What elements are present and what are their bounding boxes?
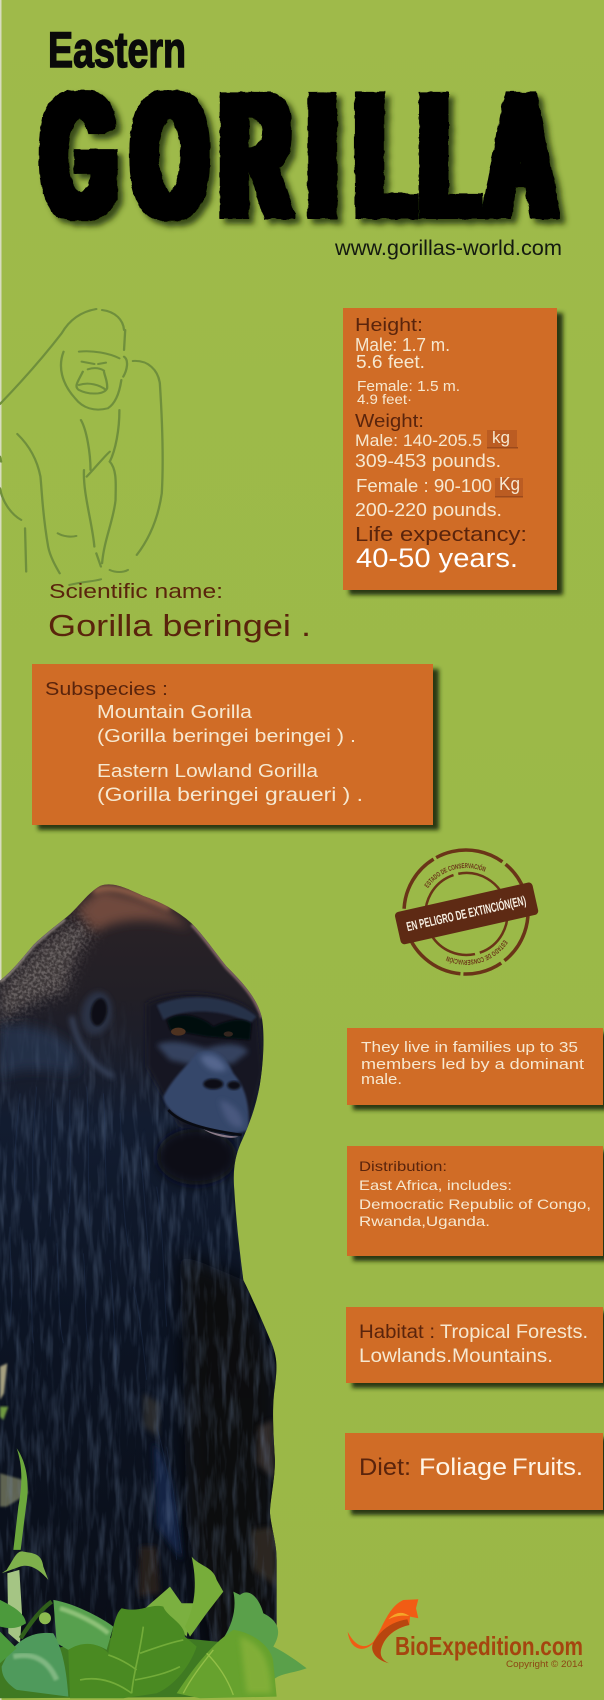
kg highlight xyxy=(487,430,523,498)
panel: families xyxy=(347,1028,603,1105)
height text: 4.9 feet· xyxy=(357,391,412,407)
back leaf xyxy=(143,1587,193,1637)
centre leaf xyxy=(68,1606,197,1698)
diet text: Diet: xyxy=(359,1454,411,1481)
habitat text: Tropical Forests. xyxy=(440,1321,588,1343)
life expectancy text: 40-50 years. xyxy=(356,543,518,573)
height text: 5.6 feet. xyxy=(356,352,425,372)
weight text: Female : 90-100 xyxy=(356,476,492,496)
foliage base xyxy=(0,1633,267,1698)
upper right leaf xyxy=(185,1557,223,1637)
lower arm shading xyxy=(0,1253,277,1660)
panel: subspecies xyxy=(32,664,433,825)
gorilla shading and fur xyxy=(0,860,283,1687)
foliage xyxy=(0,1448,307,1698)
far right leaf xyxy=(223,1592,307,1680)
stamp band: EN PELIGRO DE EXTINCIÓN(EN) xyxy=(405,893,527,934)
icon: conservation stamp xyxy=(395,848,538,976)
life expectancy text: Life expectancy: xyxy=(355,523,527,546)
subspecies heading: Subspecies : xyxy=(45,679,168,699)
gorilla face xyxy=(147,994,263,1185)
habitat text: Habitat : xyxy=(359,1321,435,1343)
website url: www.gorillas-world.com xyxy=(334,236,562,260)
panel: measurements xyxy=(343,308,557,590)
height text: Height: xyxy=(355,315,423,335)
families text: They live in families up to 35 xyxy=(361,1040,578,1056)
copyright: Copyright © 2014 xyxy=(506,1659,583,1670)
families text: members led by a dominant xyxy=(361,1057,584,1073)
logo: BioExpedition xyxy=(348,1599,583,1670)
distribution text: East Africa, includes: xyxy=(359,1177,512,1193)
weight text: Kg xyxy=(499,474,520,494)
distribution text: Rwanda,Uganda. xyxy=(359,1213,490,1229)
weight text xyxy=(355,411,520,520)
families text xyxy=(361,1040,584,1088)
icon: gorilla line drawing xyxy=(0,309,163,585)
weight text: kg xyxy=(492,428,510,447)
gorilla body xyxy=(0,884,277,1687)
distribution text: Democratic Republic of Congo, xyxy=(359,1196,591,1212)
height text xyxy=(355,315,460,407)
small leaves xyxy=(2,1551,48,1580)
stamp curved text: ESTADO DE CONSERVACIÓN xyxy=(424,863,486,888)
panel: diet xyxy=(345,1433,603,1510)
habitat text: Lowlands.Mountains. xyxy=(359,1345,553,1367)
ear xyxy=(80,990,114,1036)
panel: distribution xyxy=(347,1146,603,1256)
subspecies list: Eastern Lowland Gorilla xyxy=(97,760,319,781)
life expectancy text xyxy=(355,523,527,573)
label: scientific name: Scientific name: xyxy=(49,581,223,603)
title: GORILLA: GORILLA xyxy=(43,57,554,253)
weight text: 200-220 pounds. xyxy=(355,500,502,520)
habitat text xyxy=(359,1321,588,1367)
stamp band xyxy=(394,882,539,945)
families text: male. xyxy=(361,1072,402,1088)
panel: habitat xyxy=(346,1307,603,1383)
weight text: Male: 140-205.5 xyxy=(355,431,482,450)
dark stem xyxy=(21,1602,52,1638)
distribution text: Distribution: xyxy=(359,1158,447,1174)
weight text: Weight: xyxy=(355,411,424,431)
height text: Female: 1.5 m. xyxy=(357,378,460,395)
left leaves xyxy=(0,1600,26,1663)
bottom left leaf xyxy=(2,1633,68,1697)
stamp curved text: ESTADO DE CONSERVACIÓN xyxy=(446,940,508,965)
bud xyxy=(39,1612,51,1624)
subspecies list: (Gorilla beringei graueri ) . xyxy=(97,784,363,806)
weight text: 309-453 pounds. xyxy=(355,451,501,471)
icon: fox xyxy=(348,1599,418,1663)
subspecies list xyxy=(97,701,363,806)
title xyxy=(43,22,562,260)
diet text: Fruits. xyxy=(512,1454,583,1481)
title: Eastern: Eastern xyxy=(48,22,186,78)
subspecies list: (Gorilla beringei beringei ) . xyxy=(97,725,356,746)
height text: Male: 1.7 m. xyxy=(355,335,450,355)
leaf stem xyxy=(13,1448,28,1550)
gorilla photo illustration xyxy=(0,860,307,1698)
species name: Gorilla beringei . xyxy=(48,608,311,643)
stamp curved text xyxy=(424,863,508,965)
scientific name xyxy=(48,581,311,643)
veins right xyxy=(183,1650,233,1695)
subspecies list: Mountain Gorilla xyxy=(97,701,253,722)
diet text: Foliage xyxy=(419,1454,507,1481)
distribution text xyxy=(359,1158,591,1229)
diet text xyxy=(359,1454,583,1481)
left pale leaf xyxy=(53,1600,113,1650)
pale stalk xyxy=(7,1570,22,1643)
right large leaf xyxy=(177,1630,277,1698)
